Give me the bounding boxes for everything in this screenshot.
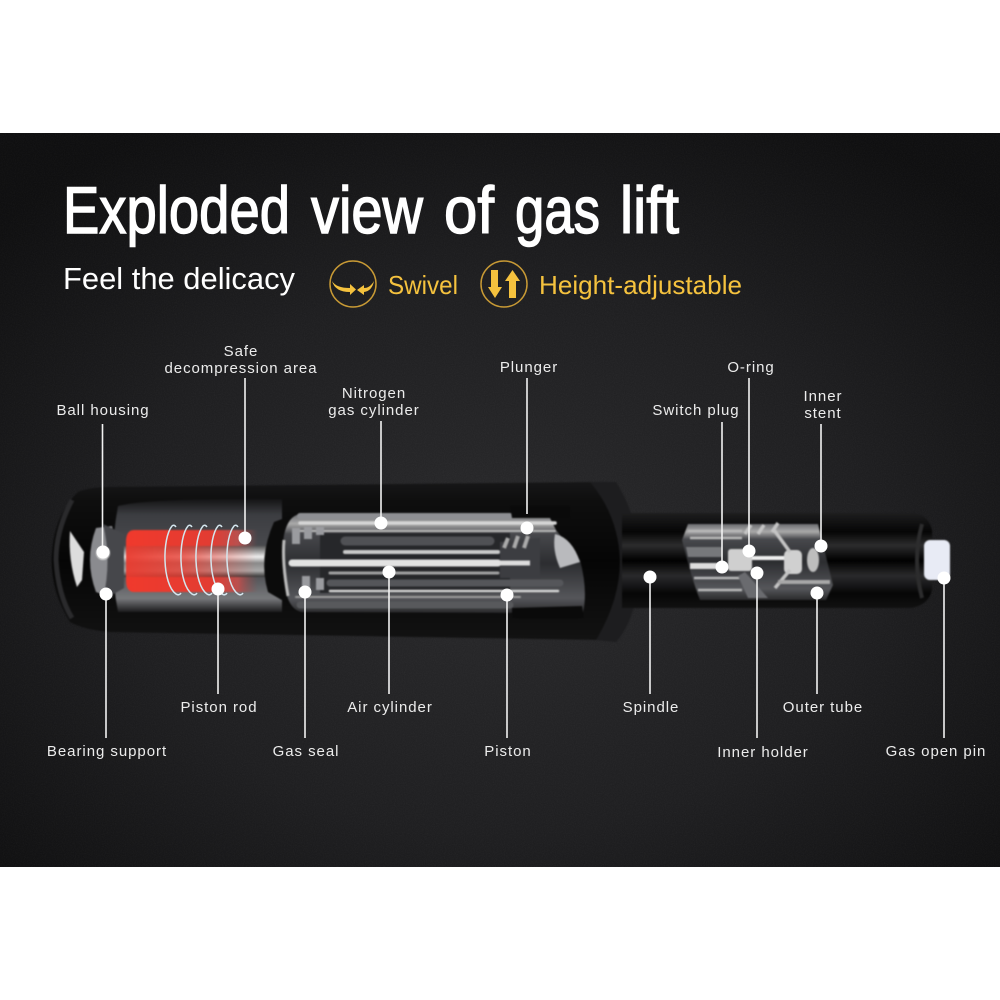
outer cylinder body bbox=[52, 482, 626, 640]
part labels: Air cylinder bbox=[347, 699, 433, 716]
right piston block bbox=[500, 534, 580, 578]
part labels: Ball housing bbox=[56, 402, 150, 419]
lower right dark clip bbox=[512, 606, 584, 619]
plunger bbox=[510, 506, 570, 518]
spindle tube bbox=[622, 513, 932, 608]
part labels: decompression area bbox=[164, 360, 318, 377]
left gas seal block bbox=[284, 527, 324, 596]
dark piston head bbox=[264, 516, 292, 606]
title: of bbox=[444, 173, 495, 247]
spindle inner parts bbox=[686, 523, 830, 598]
part labels: Inner bbox=[804, 388, 842, 405]
red overlay on rod bbox=[126, 546, 256, 577]
part labels: Bearing support bbox=[47, 743, 167, 760]
spring coils bbox=[165, 525, 243, 595]
part labels: gas cylinder bbox=[328, 402, 420, 419]
part labels: Piston rod bbox=[180, 699, 258, 716]
spindle end ring bbox=[917, 524, 922, 598]
title: gas bbox=[515, 173, 600, 247]
part labels: Plunger bbox=[500, 359, 558, 376]
callout dots bbox=[96, 516, 950, 602]
part labels: O-ring bbox=[727, 359, 775, 376]
chrome rails bbox=[292, 516, 560, 605]
part labels: Spindle bbox=[623, 699, 679, 716]
title: lift bbox=[620, 173, 679, 247]
title bbox=[63, 173, 679, 247]
gas lift cylinder illustration bbox=[52, 482, 950, 642]
inner gas cylinder assembly bbox=[282, 514, 585, 613]
part labels: Switch plug bbox=[652, 402, 740, 419]
ball housing parts bbox=[70, 524, 124, 600]
red decompression zone bbox=[126, 530, 258, 592]
part labels: Gas seal bbox=[273, 743, 339, 760]
icon: height adjustable bbox=[481, 261, 527, 307]
cylinder window bbox=[113, 499, 282, 612]
icon: swivel bbox=[330, 261, 376, 307]
piston rod bbox=[110, 546, 282, 577]
part labels: Outer tube bbox=[783, 699, 863, 716]
part labels: Inner holder bbox=[717, 744, 809, 761]
inner tube bbox=[320, 533, 510, 593]
collar ring bbox=[590, 482, 640, 642]
spindle window bbox=[682, 524, 833, 600]
part labels: Gas open pin bbox=[886, 743, 986, 760]
left cap highlight bbox=[56, 500, 72, 618]
height-adjustable label: Height-adjustable bbox=[539, 270, 742, 300]
title: Exploded bbox=[63, 173, 290, 247]
swivel label: Swivel bbox=[388, 270, 458, 300]
part labels: Piston bbox=[484, 743, 532, 760]
subtitle: Feel the delicacy bbox=[63, 261, 295, 296]
part labels: Safe bbox=[224, 343, 258, 360]
part labels: stent bbox=[804, 405, 842, 422]
part labels: Nitrogen bbox=[342, 385, 406, 402]
background panel bbox=[0, 133, 1000, 867]
title: view bbox=[311, 173, 423, 247]
callout lines bbox=[102, 378, 944, 738]
gas open pin bbox=[924, 540, 950, 580]
part labels bbox=[47, 343, 986, 761]
